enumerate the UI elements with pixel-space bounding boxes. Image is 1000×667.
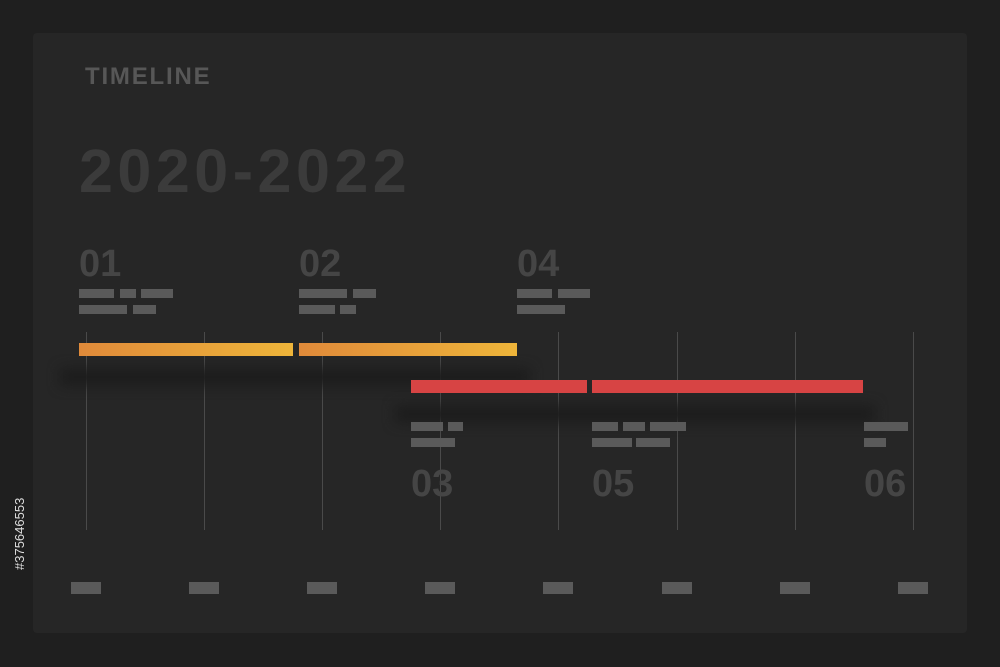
milestone 04 <box>517 243 590 314</box>
milestone 06 <box>864 422 908 505</box>
milestone 03 <box>411 422 463 505</box>
bar: 02 <box>299 343 517 356</box>
milestone 05 <box>592 422 686 505</box>
years heading: 2020-2022 <box>79 137 411 205</box>
milestone 02: 02 <box>299 243 341 285</box>
milestone 03: 03 <box>411 463 453 505</box>
bar: 03 <box>411 380 587 393</box>
milestone 06: 06 <box>864 463 906 505</box>
bar: 05 <box>592 380 863 393</box>
milestone 05: 05 <box>592 463 634 505</box>
axis labels <box>71 582 928 594</box>
side id text: #375646553 <box>12 498 27 570</box>
milestone 04: 04 <box>517 243 559 285</box>
shadows <box>60 368 530 386</box>
milestone 01: 01 <box>79 243 121 285</box>
milestone 01 <box>79 243 173 314</box>
grid lines <box>86 332 914 530</box>
milestone 02 <box>299 243 376 314</box>
title: TIMELINE <box>85 63 211 90</box>
bar: 01 <box>79 343 293 356</box>
